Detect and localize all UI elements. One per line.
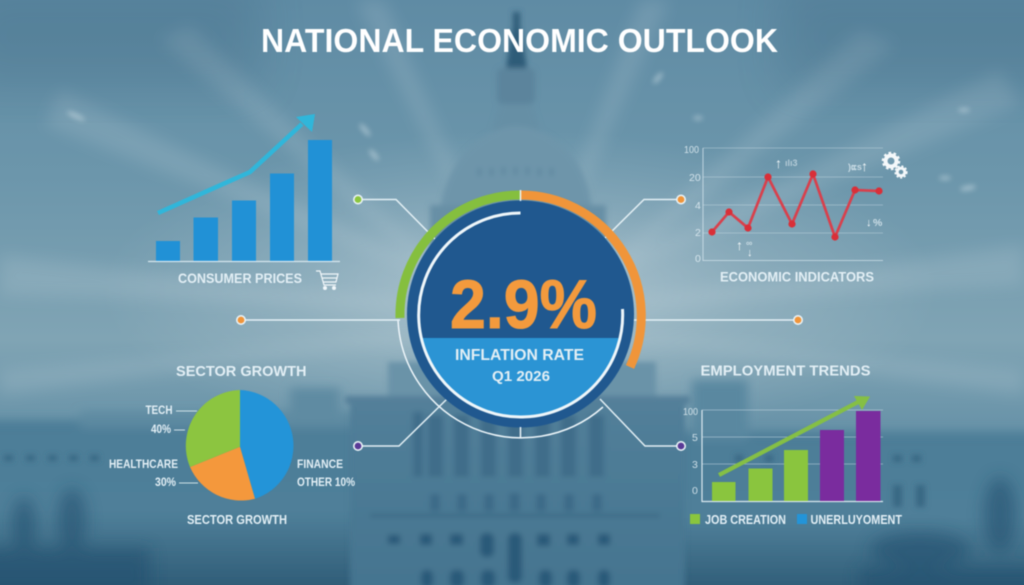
pie chart (186, 390, 293, 501)
pie labels: OTHER 10% (297, 477, 355, 489)
panel: sector growth (109, 363, 355, 527)
axis labels (684, 144, 701, 265)
panel: economic indicators (684, 144, 907, 284)
green arc (400, 195, 520, 318)
arrow: rising employment (719, 396, 870, 475)
line chart grid (703, 148, 883, 233)
axis labels: 100 (684, 144, 699, 156)
heading: EMPLOYMENT TRENDS (700, 362, 870, 380)
small indicator marks: ↓ (866, 217, 872, 229)
panel: consumer prices (148, 114, 340, 289)
central building (350, 402, 685, 585)
wing windows (4, 455, 925, 507)
axis labels (683, 406, 698, 497)
caption: SECTOR GROWTH (187, 513, 287, 527)
orange arc (521, 195, 641, 367)
pie labels: FINANCE (297, 459, 343, 471)
legend: UNERLUYOMENT (810, 513, 902, 527)
axis labels: 0 (692, 485, 698, 497)
small indicator marks: ↑ (861, 158, 868, 174)
bar chart (156, 140, 332, 261)
axis labels: 3 (692, 459, 698, 471)
gauge disc (407, 200, 634, 428)
axis labels: 100 (683, 406, 698, 418)
pie labels: 30% (155, 477, 176, 489)
small indicator marks: )ແs (848, 162, 862, 172)
arrow: rising prices (158, 114, 315, 213)
pie labels (109, 405, 355, 489)
heading: SECTOR GROWTH (176, 363, 306, 380)
axis labels: 0 (695, 253, 701, 265)
axis labels: 2 (695, 227, 701, 239)
icon: shopping cart (316, 271, 338, 289)
axis labels: 4 (695, 200, 701, 212)
central gauge: inflation rate (398, 190, 641, 438)
panel: employment trends (683, 362, 902, 527)
small indicator marks: ∞ (746, 238, 753, 248)
white ring arcs (398, 190, 623, 438)
trees, soft (0, 477, 1024, 585)
gauge value: 2.9% (450, 266, 597, 343)
small indicator marks: ılı3 (785, 158, 798, 168)
legend (690, 513, 902, 527)
pie labels: TECH (146, 405, 172, 417)
leader lines (174, 411, 198, 483)
small indicator marks: ↑ (736, 237, 743, 253)
label: ECONOMIC INDICATORS (720, 270, 874, 284)
gauge period: Q1 2026 (492, 369, 550, 385)
connector dots (237, 195, 802, 450)
small indicator marks: ↑ (775, 155, 782, 171)
small indicator marks (736, 155, 883, 259)
pie labels: 40% (151, 424, 171, 436)
title: NATIONAL ECONOMIC OUTLOOK (261, 22, 778, 59)
line series (708, 170, 883, 241)
label: CONSUMER PRICES (178, 271, 302, 286)
wings, soft (0, 380, 1024, 585)
pie labels: HEALTHCARE (109, 459, 178, 471)
small indicator marks: ↓ (747, 247, 752, 259)
small indicator marks: % (873, 217, 883, 229)
gauge lower panel (422, 338, 619, 416)
axis labels: 5 (692, 432, 698, 444)
axis labels: 20 (689, 172, 701, 184)
gauge label: INFLATION RATE (455, 347, 584, 364)
icon: gears (883, 153, 907, 178)
bar chart (712, 411, 880, 501)
legend: JOB CREATION (705, 513, 786, 527)
chart frame (702, 410, 883, 464)
connector lines (241, 200, 798, 446)
dome and lantern (513, 12, 520, 42)
